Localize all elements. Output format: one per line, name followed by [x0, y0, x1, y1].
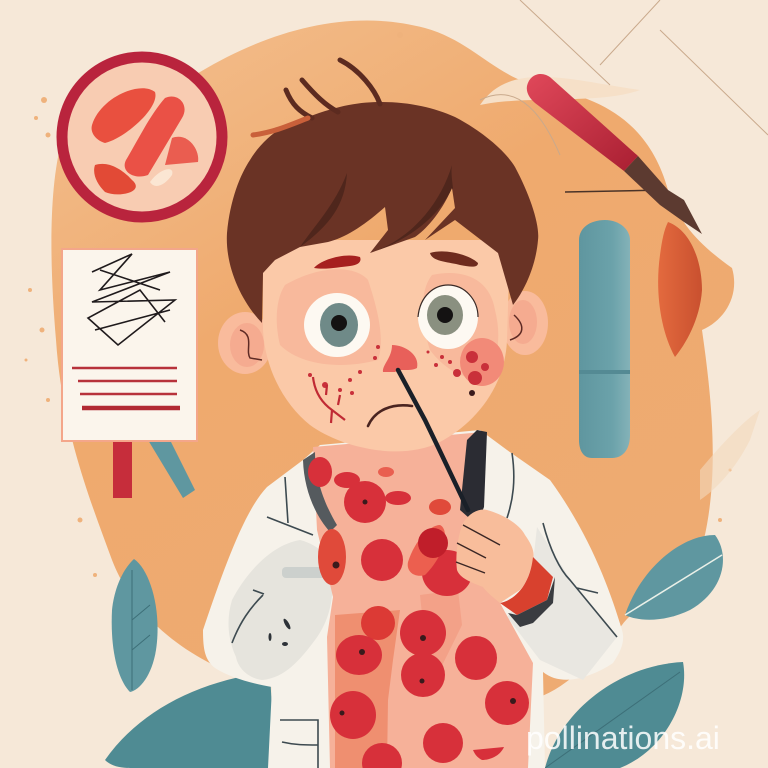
- eye shadows: [277, 269, 381, 365]
- hair strands: [286, 60, 380, 118]
- icon: teal tube: [579, 220, 630, 458]
- icon: red tube instrument: [527, 74, 702, 357]
- facial rash: [308, 345, 489, 395]
- right sleeve shade: [507, 527, 617, 680]
- pale paint wisp: [480, 77, 640, 105]
- chest with rash: [303, 430, 533, 768]
- spot centres: [332, 500, 516, 716]
- chart scribble: [88, 254, 175, 345]
- head: [218, 60, 548, 451]
- right ear: [502, 291, 548, 355]
- hair shading: [300, 165, 453, 253]
- left arm fold: [229, 540, 333, 680]
- left eye: [304, 293, 370, 357]
- hand holding tool: [456, 510, 555, 627]
- medical chart clipboard: [62, 249, 197, 498]
- icon: rash circle badge: [62, 57, 222, 217]
- leaves: [105, 535, 723, 768]
- rash spots: [308, 457, 529, 768]
- nose: [383, 345, 417, 372]
- watermark: pollinations.ai: [526, 720, 720, 756]
- chart text lines: [72, 368, 177, 394]
- darker skin zone: [335, 610, 400, 768]
- black tool line: [398, 370, 468, 510]
- mouth: [368, 405, 412, 426]
- left ear: [218, 312, 272, 374]
- wrist band: [500, 557, 553, 615]
- blob edge speckles: [24, 32, 732, 577]
- face: [263, 240, 510, 451]
- hair: [227, 102, 538, 323]
- right eye: [418, 285, 478, 349]
- eyebrows: [314, 255, 361, 269]
- doctor coat: [203, 430, 623, 768]
- lapels: [303, 452, 337, 532]
